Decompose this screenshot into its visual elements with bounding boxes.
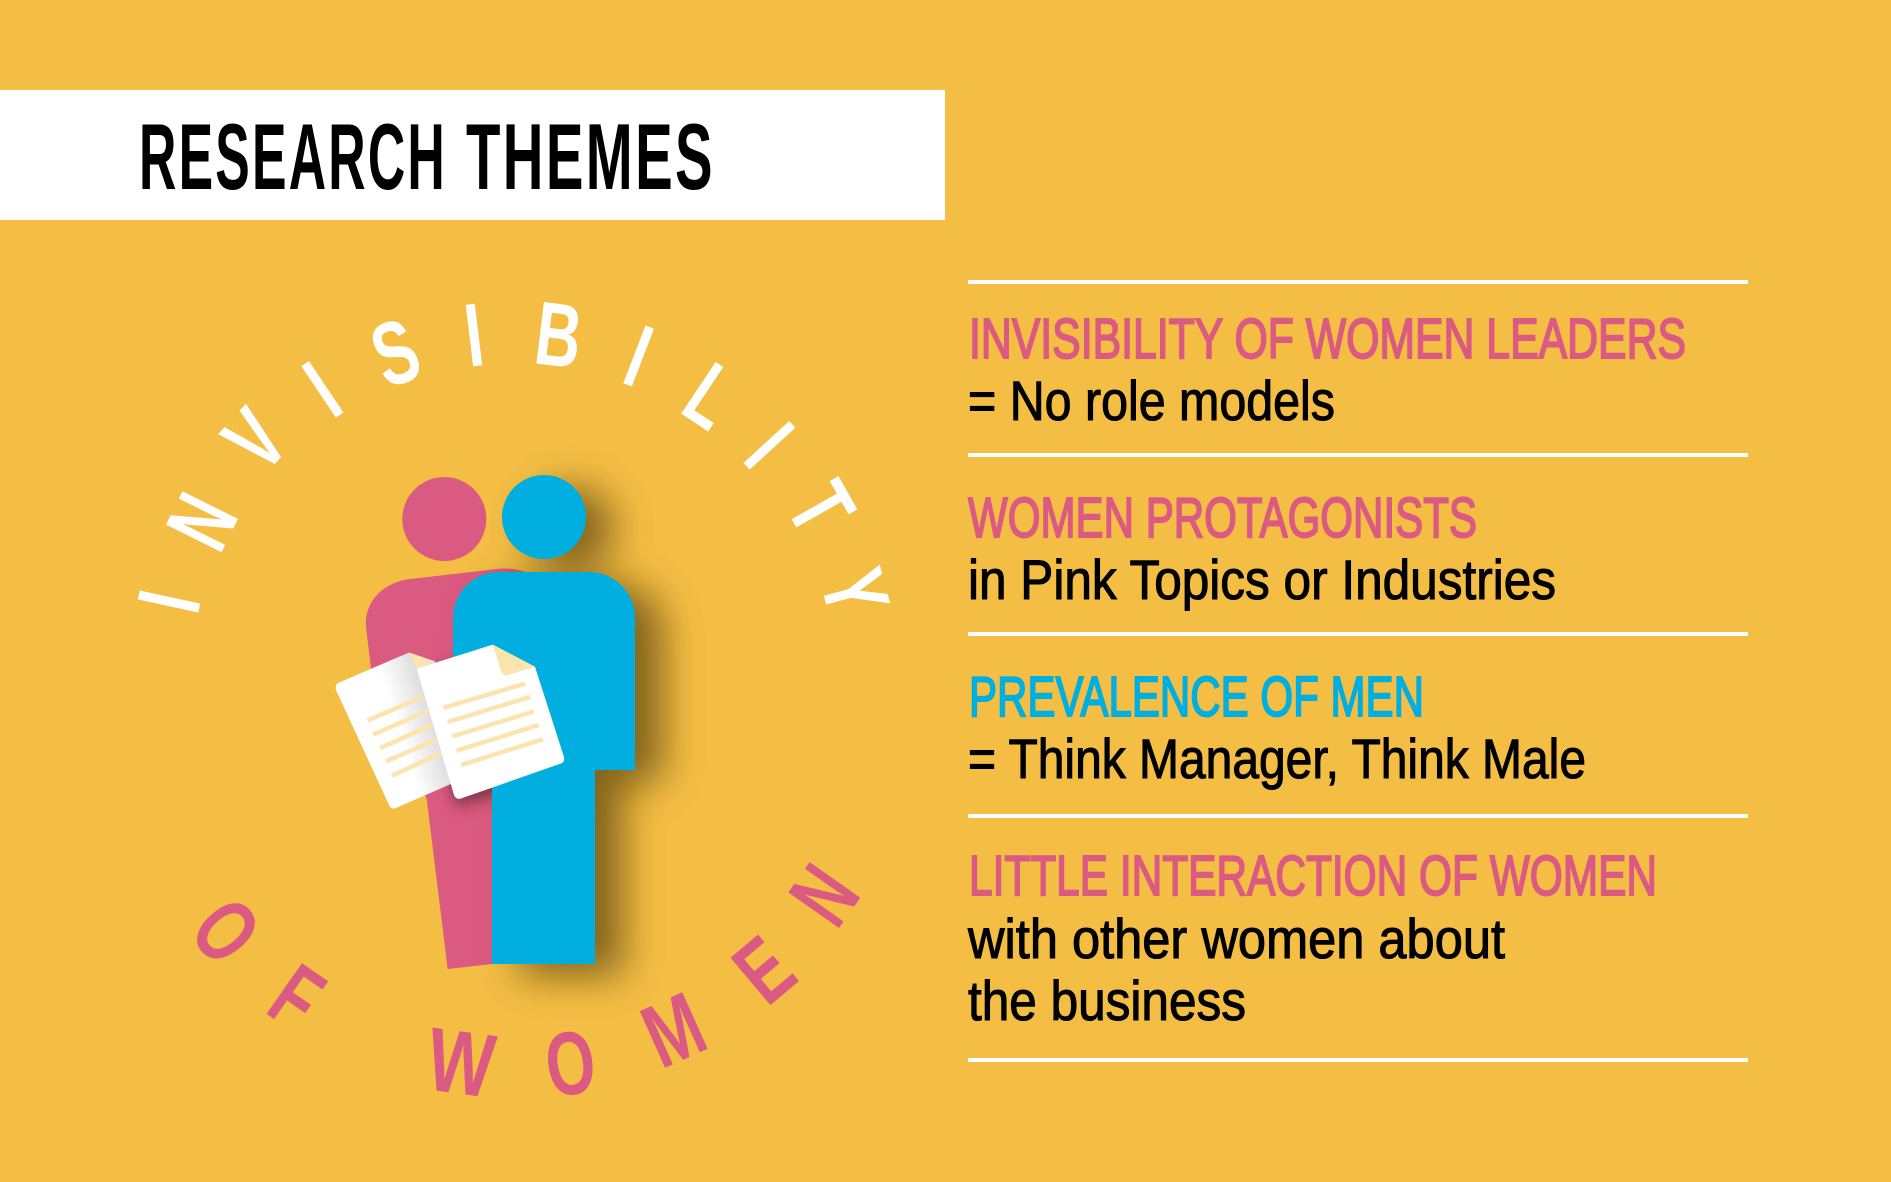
circular text: invisibility: S <box>359 300 433 408</box>
circular text: of women: O <box>539 1011 602 1117</box>
circular text: invisibility: I <box>612 307 664 406</box>
theme 3 <box>968 665 1586 790</box>
theme 4 description <box>967 907 1505 1032</box>
circular text: invisibility: N <box>148 480 258 565</box>
circular text: invisibility: I <box>726 406 811 486</box>
title: RESEARCH <box>139 104 447 209</box>
circular text: of women: O <box>172 880 279 983</box>
circular text: invisibility: I <box>288 344 358 436</box>
theme 4 description: with other women about <box>967 907 1505 970</box>
circular text: of women: F <box>252 946 340 1050</box>
title banner <box>0 90 945 220</box>
theme 3 heading: PREVALENCE OF MEN <box>969 665 1424 729</box>
circular text: of women: W <box>421 1009 501 1118</box>
circular text: invisibility: B <box>530 284 587 388</box>
circular text: invisibility: I <box>119 583 220 621</box>
paper shadow on pink leg <box>434 656 492 814</box>
theme 2 description: in Pink Topics or Industries <box>968 548 1556 611</box>
circular text: invisibility: I <box>459 285 489 386</box>
theme 4 description: the business <box>968 969 1246 1032</box>
circular text: invisibility: T <box>767 466 875 550</box>
figure shadow <box>481 487 663 976</box>
circular text: invisibility: L <box>667 345 754 449</box>
theme 2 <box>968 486 1556 611</box>
theme 2 heading: WOMEN PROTAGONISTS <box>968 486 1477 550</box>
pink figure <box>366 477 540 969</box>
theme 4 <box>967 844 1657 1032</box>
theme 4 heading: LITTLE INTERACTION OF WOMEN <box>969 844 1657 908</box>
title: THEMES <box>466 104 715 209</box>
theme 3 description: = Think Manager, Think Male <box>968 727 1586 790</box>
theme 1 description: = No role models <box>968 369 1335 432</box>
circular text: invisibility: V <box>205 391 307 489</box>
icon: two people holding documents <box>336 475 663 976</box>
circular text: invisibility: Y <box>801 559 908 625</box>
front document <box>417 645 564 799</box>
circular text: invisibility <box>119 284 908 625</box>
blue figure <box>453 475 635 964</box>
back document <box>336 652 460 809</box>
circular text: of women <box>172 848 879 1118</box>
theme 1 <box>968 307 1686 432</box>
circular text: of women: E <box>714 917 813 1023</box>
circular text: of women: N <box>771 848 879 943</box>
circular text: of women: M <box>628 972 720 1087</box>
